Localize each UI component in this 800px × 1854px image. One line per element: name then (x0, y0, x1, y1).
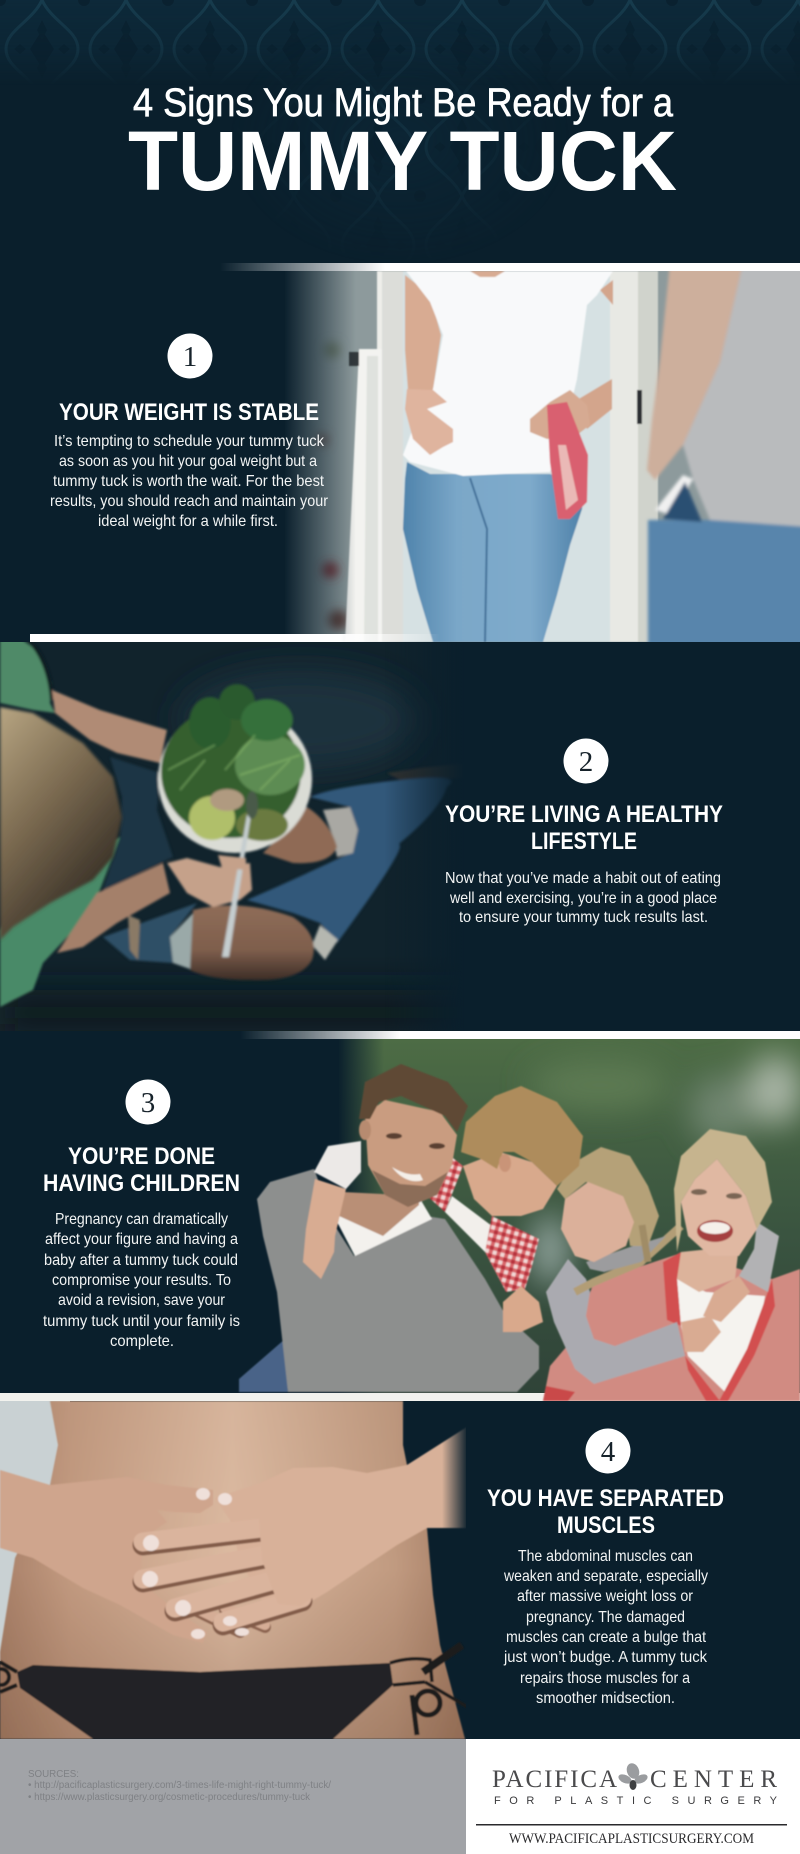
photo: woman with tape measure at a mirror (288, 271, 800, 642)
heading 3: HAVING CHILDREN (43, 1170, 240, 1197)
body text 4: weaken and separate, especially (503, 1568, 708, 1585)
bikini ties (390, 1659, 476, 1712)
number badge 2: 2 (579, 746, 593, 778)
body text 3: Pregnancy can dramatically (55, 1211, 228, 1228)
right hand shadow fingers (143, 1530, 302, 1625)
sources heading: SOURCES: (28, 1769, 79, 1780)
website url: WWW.PACIFICAPLASTICSURGERY.COM (509, 1831, 754, 1847)
photo: hands on abdomen (0, 1401, 480, 1739)
fingers on fork (218, 855, 246, 870)
lower fingers (195, 1610, 265, 1632)
arm fade to panel (442, 1415, 468, 1537)
shirt (0, 638, 55, 713)
body text 4: after massive weight loss or (517, 1588, 694, 1605)
jeans (239, 1339, 288, 1392)
body text 1: as soon as you hit your goal weight but a (59, 453, 317, 470)
icon: logo emblem (617, 1761, 649, 1790)
body text 3: tummy tuck until your family is (43, 1313, 240, 1330)
number badge 3 (126, 1080, 170, 1124)
boy hand (503, 1286, 543, 1332)
body text 4: smoother midsection. (536, 1690, 675, 1707)
body text 4: just won’t budge. A tummy tuck (503, 1649, 708, 1666)
number badge 4 (586, 1428, 630, 1474)
body text 3 (43, 1211, 240, 1350)
forearm and hand (57, 863, 170, 953)
bottom band (240, 1031, 800, 1039)
woman hair strand (575, 1226, 681, 1292)
jeans (103, 757, 173, 890)
photo: bowl of salad on crossed legs (0, 635, 484, 1035)
right arm and hand (215, 1425, 470, 1615)
panel: sign 2 (0, 635, 800, 1039)
plate (156, 726, 314, 855)
bikini (17, 1663, 393, 1739)
top band (220, 263, 800, 271)
hands (405, 389, 453, 455)
heading 1: YOUR WEIGHT IS STABLE (59, 399, 319, 426)
woman right arm (577, 379, 612, 429)
boy arm and sleeve (303, 1179, 346, 1279)
panel: sign 4 (0, 1401, 724, 1739)
man neck (339, 1192, 419, 1236)
body text 3: baby after a tummy tuck could (44, 1252, 238, 1269)
body text 4: muscles can create a bulge that (506, 1629, 706, 1646)
girl sleeve (546, 1259, 685, 1384)
heading 2: LIFESTYLE (531, 828, 637, 855)
shirt (403, 271, 613, 476)
woman hair (674, 1129, 772, 1252)
upper arm (52, 690, 167, 763)
body text 1: results, you should reach and maintain your (50, 493, 329, 510)
heading 4: YOU HAVE SEPARATED (487, 1485, 724, 1512)
nails (142, 1488, 249, 1639)
torn denim patch (323, 807, 358, 857)
title line 1: 4 Signs You Might Be Ready for a (133, 81, 674, 125)
woman neck (677, 1246, 739, 1292)
heading 2: YOU’RE LIVING A HEALTHY (445, 801, 723, 828)
toes (388, 767, 446, 780)
body text 4: The abdominal muscles can (518, 1548, 693, 1565)
cardigan trim (663, 1252, 681, 1326)
woman left arm (405, 275, 441, 390)
heading 4 (487, 1485, 724, 1539)
boy shirt (445, 1196, 492, 1252)
body text 4: repairs those muscles for a (520, 1670, 690, 1687)
body text 1: It’s tempting to schedule your tummy tuck (54, 433, 325, 450)
white band above section 4 (0, 1393, 800, 1401)
heading 2 (445, 801, 723, 855)
salad stalks (168, 735, 300, 790)
body text 2: to ensure your tummy tuck results last. (459, 909, 708, 926)
back of right hand over finger bases (258, 1480, 400, 1606)
body text 1 (50, 433, 329, 530)
panel: logo (466, 1739, 800, 1854)
title line 2: TUMMY TUCK (128, 114, 677, 208)
logo wordmark (492, 1766, 778, 1807)
girl hair and face (557, 1147, 659, 1246)
body text 3: compromise your results. To (52, 1272, 231, 1289)
jeans (403, 462, 584, 642)
source links: • http://pacificaplasticsurgery.com/3-times-life-might-right-tummy-tuck/ (28, 1780, 331, 1791)
divider line (476, 1824, 787, 1826)
hair (0, 707, 122, 940)
man tee (334, 1197, 432, 1256)
body text 3: avoid a revision, save your (58, 1292, 226, 1309)
panel: sign 1 (50, 263, 800, 650)
photo: family piggyback (230, 1039, 800, 1401)
body text 2: well and exercising, you’re in a good place (449, 890, 717, 907)
boy face (463, 1151, 557, 1216)
left arm and hand (0, 1470, 213, 1643)
woman shirt (677, 1279, 765, 1392)
body text 2: Now that you’ve made a habit out of eating (445, 870, 721, 887)
body text 1: tummy tuck is worth the wait. For the best (53, 473, 325, 490)
fork (222, 815, 251, 957)
panel: sources (0, 1739, 466, 1854)
number badge 4: 4 (601, 1436, 616, 1468)
white band above section 2 (30, 634, 440, 642)
number badge 1 (168, 334, 212, 378)
number badge 1: 1 (183, 341, 197, 373)
body text 2 (445, 870, 721, 926)
heading 3: YOU’RE DONE (68, 1143, 215, 1170)
logo wordmark: PACIFICA (492, 1766, 617, 1793)
panel: sign 3 (43, 1039, 800, 1401)
number badge 2 (564, 738, 608, 784)
logo wordmark: FOR PLASTIC SURGERY (494, 1795, 778, 1807)
body text 3: affect your figure and having a (45, 1231, 238, 1248)
body text 1: ideal weight for a while first. (98, 513, 278, 530)
woman face (681, 1159, 757, 1256)
number badge 3: 3 (141, 1087, 155, 1119)
tape measure (547, 402, 588, 519)
body text 4: pregnancy. The damaged (526, 1609, 685, 1626)
heading 4: MUSCLES (557, 1512, 655, 1539)
girl collar (586, 1236, 666, 1272)
source links: • https://www.plasticsurgery.org/cosmetic-procedures/tummy-tuck (28, 1792, 311, 1803)
man face (365, 1100, 457, 1207)
man sweater (257, 1169, 539, 1392)
boy hair (461, 1086, 583, 1186)
source links (28, 1780, 331, 1803)
body text 4 (503, 1548, 708, 1707)
torso (0, 1401, 465, 1739)
body text 3: complete. (110, 1333, 174, 1350)
title (128, 81, 677, 208)
man hair (359, 1064, 468, 1132)
woman cardigan (543, 1252, 800, 1401)
heading 3 (43, 1143, 240, 1197)
man features (386, 1133, 402, 1139)
right hand fingers (143, 1527, 302, 1622)
knees (263, 807, 337, 863)
logo wordmark: CENTER (650, 1766, 777, 1793)
